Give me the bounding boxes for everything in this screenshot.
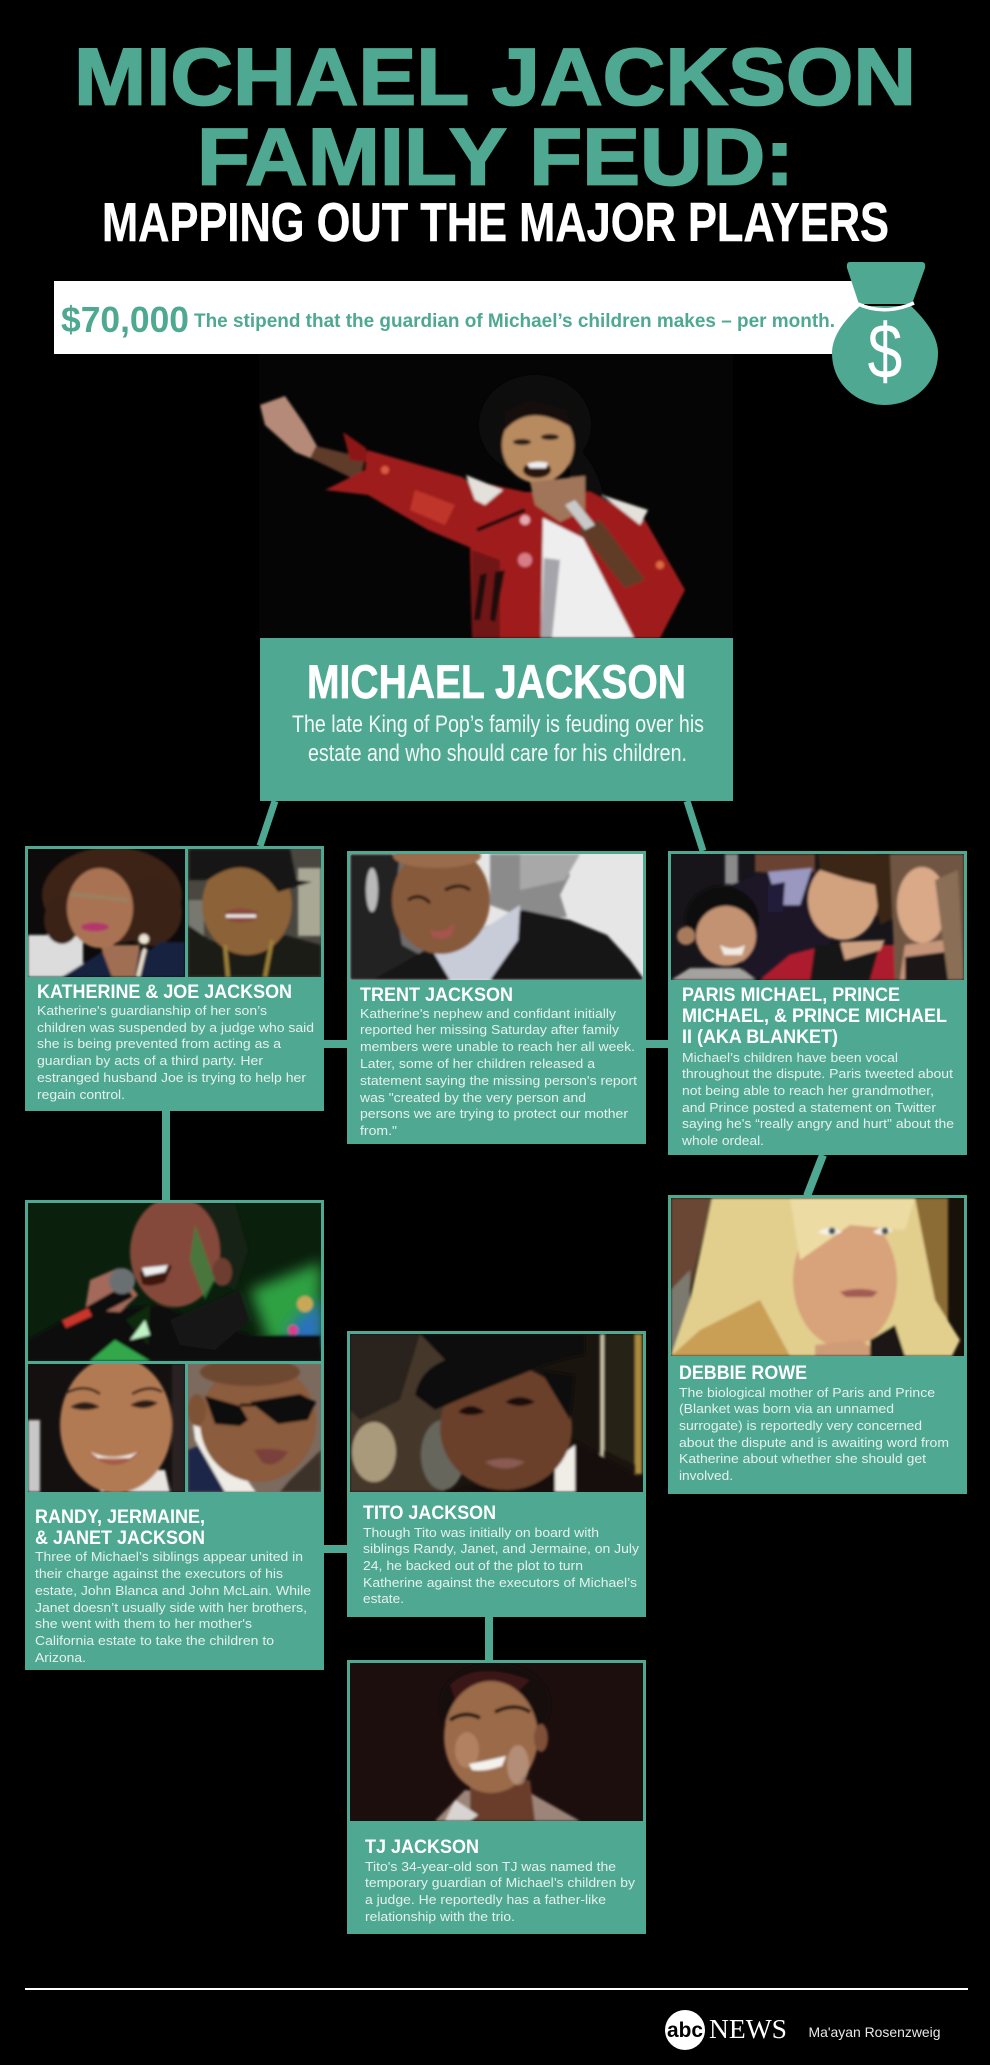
photo: Janet Jackson (28, 1357, 185, 1493)
text block (365, 1859, 635, 1924)
text block (679, 1385, 949, 1483)
connector: Katherine to Trent (324, 1040, 348, 1048)
panel: Randy, Jermaine and Janet Jackson (25, 1197, 324, 1670)
heading (35, 1507, 205, 1549)
heading: II (AKA BLANKET) (682, 1027, 838, 1048)
photo: Tito Jackson (350, 1334, 643, 1492)
connector: Tito to TJ (485, 1617, 493, 1661)
text block: Arizona. (35, 1650, 86, 1665)
logo: ABC News: abc (667, 2019, 703, 2042)
callout: stipend banner (54, 281, 864, 354)
text block (363, 1525, 639, 1606)
text block: not being able to reach her grandmother, (682, 1083, 934, 1098)
panel: Michael Jackson: estate and who should care for his children. (308, 740, 687, 767)
callout: stipend banner: $70,000 (61, 299, 189, 340)
heading: RANDY, JERMAINE, (35, 1507, 205, 1528)
text block: The biological mother of Paris and Prince (679, 1385, 935, 1400)
text block: a judge. He reportedly has a father-like (365, 1892, 606, 1907)
panel: Paris, Prince and Blanket (668, 851, 967, 1155)
photo: Debbie Rowe (671, 1198, 964, 1356)
text block: their charge against the executors of his (35, 1566, 283, 1581)
panel: Michael Jackson (260, 638, 733, 801)
logo: ABC News: NEWS (709, 2014, 787, 2044)
text block: relationship with the trio. (365, 1909, 515, 1924)
panel: Tito Jackson (347, 1331, 646, 1617)
text block: siblings Randy, Janet, and Jermaine, on July (363, 1541, 639, 1556)
text block: Michael’s children have been vocal (682, 1050, 898, 1065)
logo: ABC News (665, 2010, 787, 2050)
panel: Michael Jackson: The late King of Pop’s family is feuding over his (292, 711, 704, 738)
text block: reported her missing Saturday after family (360, 1022, 619, 1037)
text block: about the dispute and is awaiting word from (679, 1435, 949, 1450)
text block: (Blanket was born via an unnamed (679, 1401, 894, 1416)
text block: estate, John Blanca and John McLain. While (35, 1583, 311, 1598)
text block: Katherine's nephew and confidant initially (360, 1006, 616, 1021)
text block: throughout the dispute. Paris tweeted about (682, 1066, 953, 1081)
connector: Michael to children (687, 801, 703, 851)
text block: Janet doesn’t usually side with her brothers, (35, 1600, 307, 1615)
photo: Michael Jackson (259, 375, 687, 638)
photo: Katherine Jackson (28, 847, 185, 977)
heading: TJ JACKSON (365, 1837, 479, 1858)
text block: persons we are trying to protect our mother (360, 1106, 629, 1121)
text block: saying he's “really angry and hurt" about the (682, 1116, 954, 1131)
credit: Ma'ayan Rosenzweig (808, 2024, 940, 2040)
photo: Joe Jackson (188, 849, 321, 977)
title (74, 32, 916, 253)
panel: Trent Jackson (347, 844, 646, 1144)
text block: Though Tito was initially on board with (363, 1525, 599, 1540)
text block: from." (360, 1123, 397, 1138)
callout: stipend banner: The stipend that the guardian of Michael’s children makes – per month. (194, 311, 835, 332)
photo: Trent Jackson (350, 844, 643, 980)
text block: Later, some of her children released a (360, 1056, 596, 1071)
text block: statement saying the missing person's report (360, 1073, 637, 1088)
text block: regain control. (37, 1087, 125, 1102)
photo: Jermaine Jackson (28, 1197, 321, 1361)
text block: members were unable to reach her all week. (360, 1039, 635, 1054)
text block (359, 1006, 637, 1138)
heading: MICHAEL, & PRINCE MICHAEL (682, 1006, 947, 1027)
text block: Katherine against the executors of Michael’s (363, 1575, 637, 1590)
photo: Randy Jackson (188, 1358, 321, 1492)
connector: children to Debbie (807, 1155, 823, 1196)
panel: Katherine and Joe Jackson (25, 846, 324, 1111)
text block: she is being prevented from acting as a (37, 1036, 282, 1051)
text block: Three of Michael’s siblings appear united in (35, 1549, 303, 1564)
text block (37, 1003, 314, 1102)
heading: TRENT JACKSON (360, 985, 513, 1006)
title: FAMILY FEUD: (197, 112, 794, 202)
text block: guardian by acts of a third party. Her (37, 1053, 264, 1068)
icon: money bag: $ (868, 307, 902, 395)
heading: TITO JACKSON (363, 1503, 496, 1524)
title: MICHAEL JACKSON (74, 32, 916, 122)
text block: surrogate) is reportedly very concerned (679, 1418, 922, 1433)
text block: children was suspended by a judge who said (37, 1020, 314, 1035)
panel: Michael Jackson: MICHAEL JACKSON (307, 655, 686, 708)
heading (682, 985, 947, 1048)
text block (35, 1549, 311, 1665)
heading: KATHERINE & JOE JACKSON (37, 982, 292, 1003)
icon: money bag (832, 262, 938, 405)
heading: & JANET JACKSON (35, 1528, 205, 1549)
panel: Debbie Rowe (668, 1195, 967, 1494)
connector: siblings to Tito (324, 1545, 348, 1553)
connector: Trent to children (646, 1040, 669, 1048)
text block: was "created by the very person and (359, 1090, 586, 1105)
text block: involved. (679, 1468, 733, 1483)
photo: TJ Jackson (350, 1663, 643, 1821)
text block: she went with them to her mother's (35, 1616, 252, 1631)
text block: temporary guardian of Michael’s children by (365, 1875, 635, 1890)
text block: 24, he backed out of the plot to turn (363, 1558, 583, 1573)
text block: estate. (363, 1591, 404, 1606)
text block: Tito's 34-year-old son TJ was named the (365, 1859, 616, 1874)
text block: estranged husband Joe is trying to help her (37, 1070, 307, 1085)
text block: California estate to take the children to (35, 1633, 274, 1648)
text block: Katherine's guardianship of her son’s (37, 1003, 267, 1018)
heading: DEBBIE ROWE (679, 1363, 807, 1384)
photo: Michael's children (671, 851, 964, 980)
text block (681, 1050, 954, 1148)
connector: Michael to Katherine and Joe (260, 801, 275, 846)
text block: Katherine about whether she should get (679, 1451, 926, 1466)
text block: whole ordeal. (681, 1133, 764, 1148)
connector: Katherine to siblings (162, 1111, 170, 1201)
panel: TJ Jackson (347, 1660, 646, 1934)
text block: and Prince posted a statement on Twitter (682, 1100, 937, 1115)
heading: PARIS MICHAEL, PRINCE (682, 985, 900, 1006)
